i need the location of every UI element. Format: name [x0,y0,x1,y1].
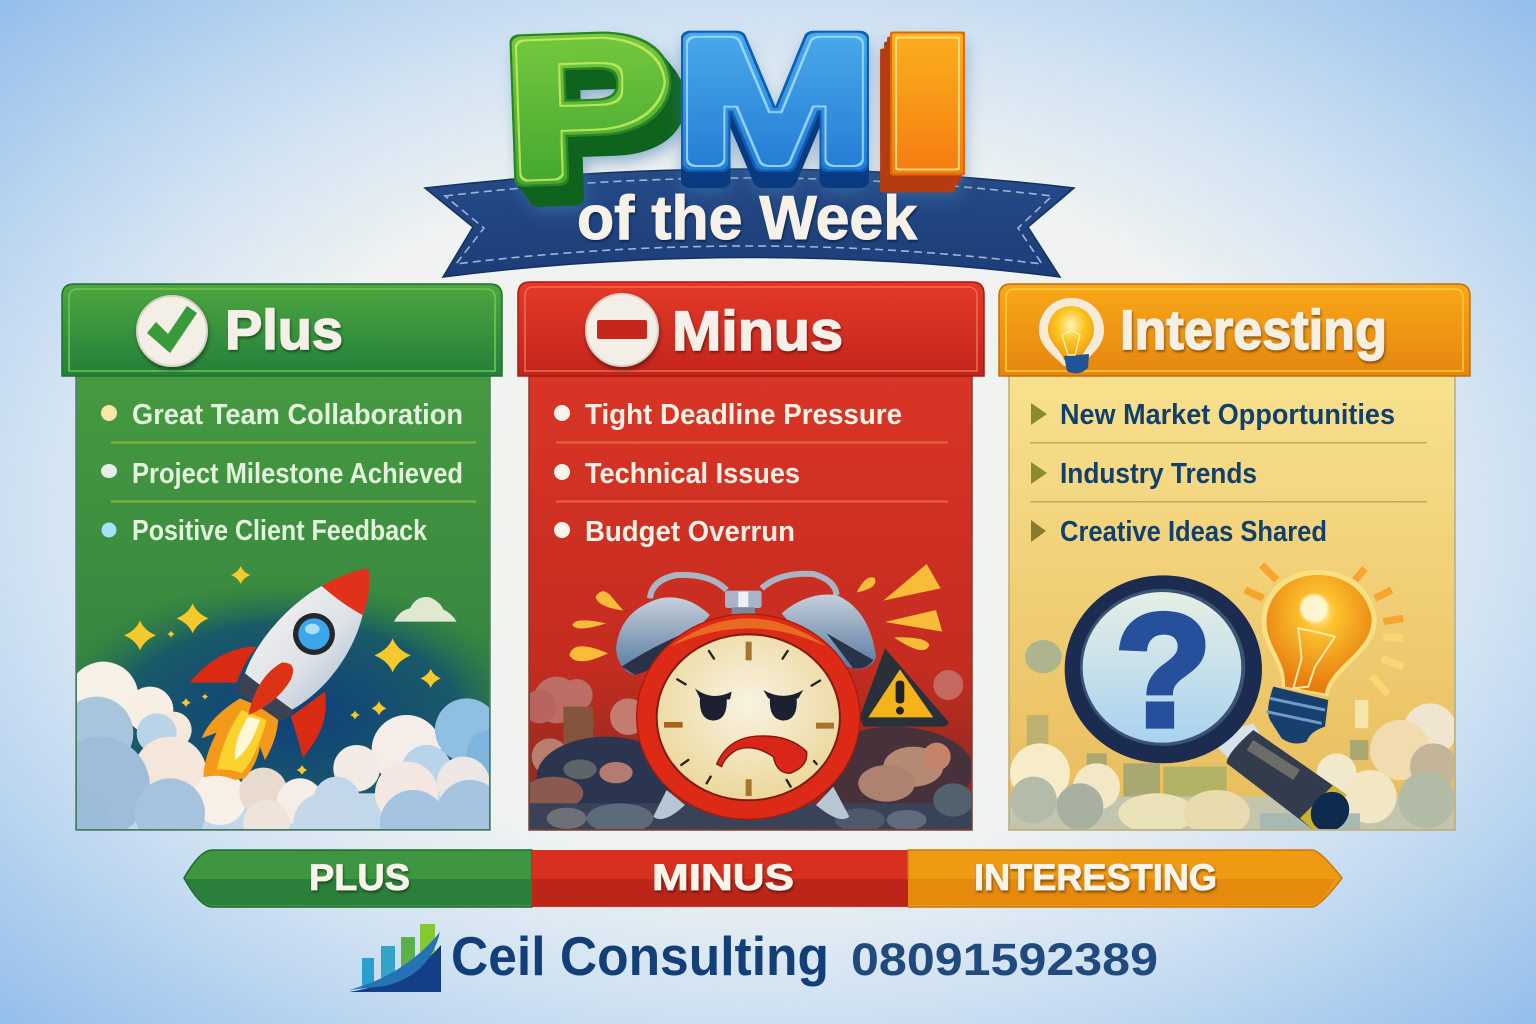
magnifying glass [1065,575,1357,839]
plus list: Great Team Collaboration [132,399,463,431]
clock ticks [664,642,834,796]
icon: light bulb [1039,298,1104,373]
panel: plus [61,283,503,831]
plus header [62,284,502,376]
footer: company logo and phone: 08091592389 [851,934,1158,985]
clock face expression [695,688,807,773]
plus header: Plus [225,298,343,361]
icon: check mark [137,296,207,366]
icon: minus sign [586,294,658,366]
letter P: P [501,0,675,222]
plus list: Positive Client Feedback [132,515,428,547]
title: PMI of the Week [425,0,1074,277]
minus list: Technical Issues [585,458,800,490]
interesting list: Creative Ideas Shared [1060,516,1327,548]
magnifying glass: ? [1115,581,1212,760]
minus header [518,282,984,376]
plus list [101,399,476,547]
plus list: Project Milestone Achieved [132,458,463,490]
rocket [189,568,369,780]
minus list: Tight Deadline Pressure [585,399,902,431]
interesting list [1030,399,1427,548]
city and clouds [1010,640,1457,837]
small cloud [394,597,457,622]
sparks [569,564,942,661]
interesting list: Industry Trends [1060,458,1257,490]
minus header: Minus [672,299,843,362]
minus body [529,370,972,830]
ribbon banner [425,169,1074,277]
plus illustration: rocket launch [77,566,489,829]
letter M: M [674,0,876,204]
panel: interesting [999,284,1470,839]
interesting header: Interesting [1120,298,1387,361]
stars [124,566,441,775]
interesting list: New Market Opportunities [1060,399,1395,431]
footer: company logo and phone [349,924,1158,992]
light bulb [1262,570,1377,744]
interesting body [1009,370,1455,830]
clock body [637,614,860,819]
minus list [554,399,948,548]
interesting header [999,284,1470,376]
plus body [76,370,490,830]
interesting illustration: magnifier and bulb [1010,565,1457,839]
legend bar: MINUS [652,857,794,898]
footer: company logo and phone: Ceil Consulting [451,925,829,987]
panel: minus [518,282,984,833]
smoke [523,670,973,833]
legend bar: INTERESTING [974,857,1217,898]
subtitle: of the Week [577,184,918,253]
legend bar [184,850,1342,907]
bells and handles [616,574,876,819]
legend bar: PLUS [309,857,410,898]
clouds [77,662,489,829]
minus illustration: angry alarm clock [523,564,973,833]
bulb rays [1245,565,1403,694]
minus list: Budget Overrun [585,516,795,548]
icon: rising bar chart logo [349,924,441,992]
warning sign [860,648,948,727]
